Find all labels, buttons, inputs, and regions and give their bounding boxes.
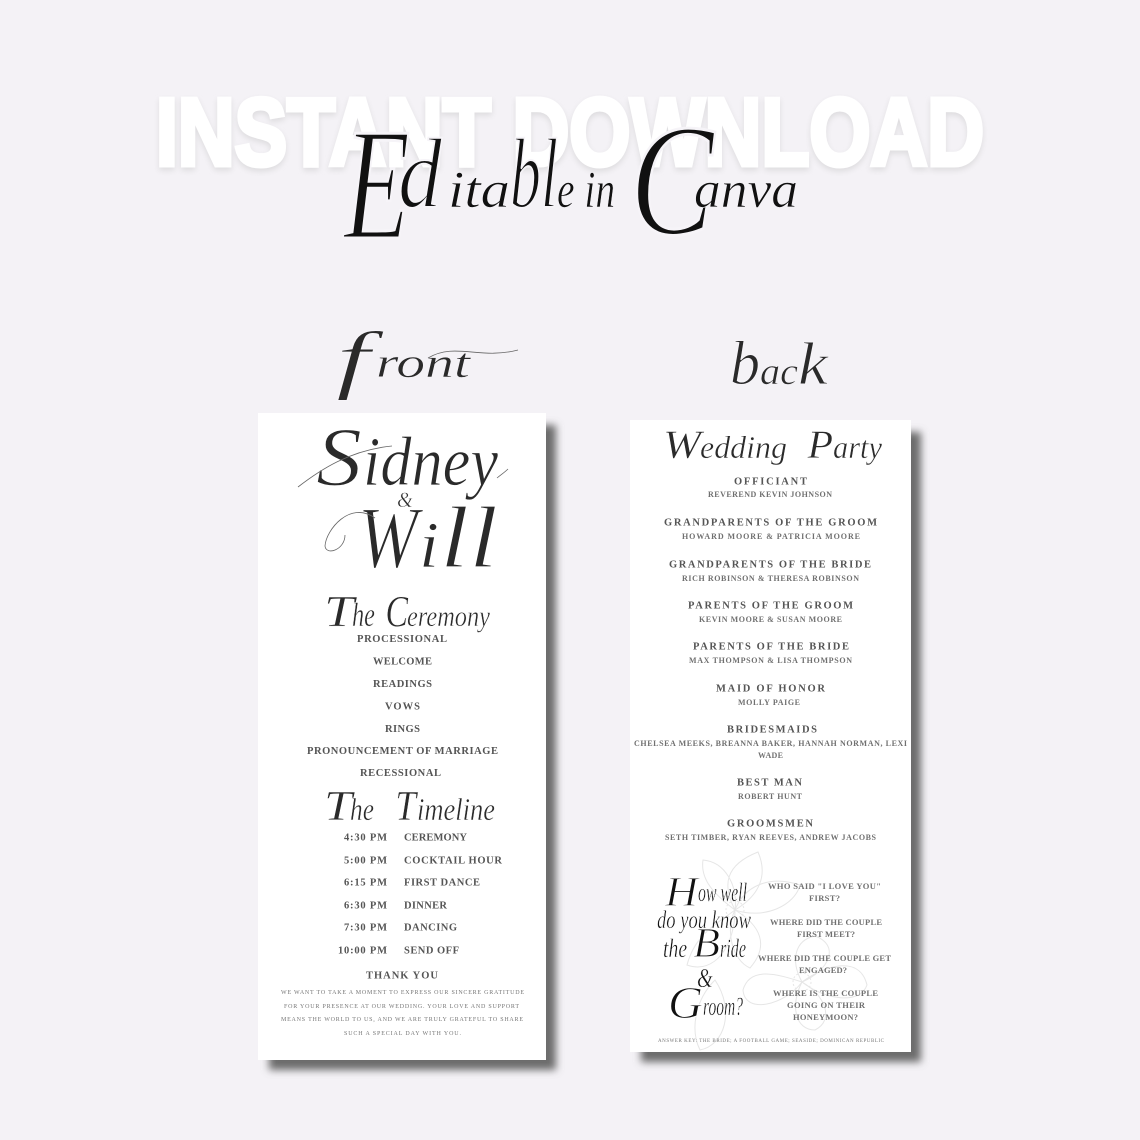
thank you message: FOR YOUR PRESENCE AT OUR WEDDING. YOUR LOVE AND SUPPORT — [284, 1004, 519, 1010]
ceremony list: PROCESSIONAL — [357, 634, 447, 645]
thank you message — [281, 990, 524, 1037]
quiz heading: how well do you know the bride and groom: B — [693, 921, 720, 967]
wedding party list: BRIDESMAIDS — [727, 724, 817, 736]
label: front — [336, 317, 518, 401]
subtitle: editable in canva: d — [398, 118, 443, 229]
names: Sidney and Will: W — [358, 490, 423, 587]
timeline schedule: 6:30 PM — [344, 900, 387, 912]
quiz heading: how well do you know the bride and groom: room? — [703, 992, 743, 1021]
names: Sidney and Will: & — [397, 487, 414, 512]
heading: the timeline: T — [386, 784, 418, 830]
wedding party list: BEST MAN — [737, 778, 802, 788]
heading: wedding party: arty — [833, 429, 883, 465]
quiz heading: how well do you know the bride and groom: H — [664, 870, 701, 916]
wedding party list — [634, 476, 907, 842]
wedding party list: ROBERT HUNT — [738, 792, 803, 801]
timeline schedule: DANCING — [404, 922, 457, 934]
thank you message: WE WANT TO TAKE A MOMENT TO EXPRESS OUR SINCERE GRATITUDE — [281, 990, 524, 996]
quiz questions: WHERE DID THE COUPLE GET — [758, 953, 891, 963]
quiz questions: HONEYMOON? — [793, 1012, 858, 1022]
wedding party list: WADE — [758, 751, 783, 760]
names: Sidney and Will: idney — [363, 424, 499, 501]
quiz questions: WHO SAID "I LOVE YOU" — [768, 881, 881, 891]
quiz questions — [758, 881, 891, 1022]
wedding party list: MAX THOMPSON & LISA THOMPSON — [689, 656, 852, 665]
wedding party list: GRANDPARENTS OF THE GROOM — [664, 518, 877, 528]
ceremony list: RINGS — [385, 724, 420, 735]
quiz heading: how well do you know the bride and groom: the — [663, 934, 692, 963]
timeline schedule: CEREMONY — [404, 832, 467, 844]
quiz questions: FIRST? — [809, 893, 840, 903]
quiz heading: how well do you know the bride and groom: ow well — [698, 878, 747, 907]
wedding party list: GROOMSMEN — [727, 818, 813, 830]
wedding party list: KEVIN MOORE & SUSAN MOORE — [699, 615, 842, 624]
ceremony list: PRONOUNCEMENT OF MARRIAGE — [307, 746, 498, 757]
heading: the timeline: imeline — [417, 791, 495, 827]
timeline schedule: 10:00 PM — [338, 946, 387, 956]
thank you message: SUCH A SPECIAL DAY WITH YOU. — [344, 1031, 462, 1037]
ceremony list — [307, 634, 498, 779]
quiz heading: how well do you know the bride and groom: & — [697, 963, 713, 993]
wedding party list: PARENTS OF THE BRIDE — [693, 642, 849, 652]
subtitle: editable in canva: anva — [694, 162, 798, 219]
names: Sidney and Will: S — [316, 411, 362, 504]
wedding party list: OFFICIANT — [734, 476, 807, 488]
ceremony list: WELCOME — [373, 656, 432, 668]
wedding party list: REVEREND KEVIN JOHNSON — [708, 490, 832, 499]
quiz heading: how well do you know the bride and groom: ride — [720, 934, 746, 963]
heading: wedding party: edding — [700, 429, 787, 465]
quiz questions: WHERE IS THE COUPLE — [773, 988, 878, 998]
illustration: line-art flowers — [687, 852, 867, 1050]
timeline schedule — [338, 832, 502, 956]
timeline schedule: SEND OFF — [404, 946, 459, 956]
timeline schedule: FIRST DANCE — [404, 878, 480, 888]
title: instant download: INSTANT DOWNLOAD — [156, 79, 984, 186]
timeline schedule: 7:30 PM — [344, 922, 387, 934]
heading: the ceremony: eremony — [407, 600, 491, 633]
label: back: b — [730, 330, 760, 398]
panel: back card — [630, 420, 921, 1062]
quiz heading: how well do you know the bride and groom: do you know — [657, 907, 751, 934]
wedding party list: RICH ROBINSON & THERESA ROBINSON — [682, 574, 859, 583]
label: front: ront — [376, 341, 472, 387]
wedding party list: PARENTS OF THE GROOM — [688, 600, 853, 612]
heading: the timeline: he — [350, 791, 374, 827]
heading: thank you: THANK YOU — [366, 970, 438, 982]
ceremony list: RECESSIONAL — [360, 768, 441, 779]
panel: front card — [258, 411, 556, 1070]
timeline schedule: 4:30 PM — [344, 832, 387, 844]
subtitle: editable in canva: bl — [510, 118, 558, 229]
subtitle: editable in canva: E — [343, 95, 410, 273]
subtitle: editable in canva: ita — [448, 162, 510, 219]
wedding party list: MAID OF HONOR — [716, 684, 825, 694]
label: back: k — [798, 331, 830, 397]
subtitle: editable in canva: C — [630, 91, 716, 269]
wedding party list: GRANDPARENTS OF THE BRIDE — [669, 560, 871, 570]
quiz questions: WHERE DID THE COUPLE — [770, 917, 882, 927]
label: front: f — [336, 317, 384, 401]
subtitle: editable in canva: e in — [557, 162, 625, 219]
wedding party list: HOWARD MOORE & PATRICIA MOORE — [682, 532, 860, 541]
names: Sidney and Will — [298, 411, 508, 587]
quiz questions: FIRST MEET? — [797, 929, 855, 939]
quiz heading: how well do you know the bride and groom: G — [668, 977, 703, 1028]
heading: the ceremony: he — [352, 597, 375, 634]
heading: wedding party: W — [663, 422, 705, 467]
heading: the ceremony: C — [377, 587, 408, 636]
heading: wedding party: P — [797, 422, 833, 467]
quiz questions: ENGAGED? — [799, 965, 847, 975]
wedding party list: CHELSEA MEEKS, BREANNA BAKER, HANNAH NORMAN, LEXI — [634, 739, 907, 748]
thank you message: MEANS THE WORLD TO US, AND WE ARE TRULY GRATEFUL TO SHARE — [281, 1017, 523, 1023]
quiz questions: GOING ON THEIR — [787, 1000, 866, 1010]
ceremony list: READINGS — [373, 679, 432, 690]
ceremony list: VOWS — [385, 702, 420, 712]
timeline schedule: DINNER — [404, 900, 447, 912]
timeline schedule: COCKTAIL HOUR — [404, 856, 502, 866]
timeline schedule: 6:15 PM — [344, 878, 387, 888]
wedding party list: MOLLY PAIGE — [738, 698, 800, 707]
label: back: ac — [760, 351, 798, 393]
answer key: ANSWER KEY: THE BRIDE; A FOOTBALL GAME; SEASIDE; DOMINICAN REPUBLIC — [658, 1039, 885, 1044]
heading: the timeline: T — [324, 784, 355, 830]
wedding party list: SETH TIMBER, RYAN REEVES, ANDREW JACOBS — [665, 833, 877, 842]
quiz heading: how well do you know the bride and groom — [657, 870, 751, 1028]
names: Sidney and Will: i — [419, 509, 439, 582]
names: Sidney and Will: ll — [440, 490, 498, 587]
heading: the ceremony: T — [324, 587, 358, 636]
timeline schedule: 5:00 PM — [344, 856, 387, 866]
